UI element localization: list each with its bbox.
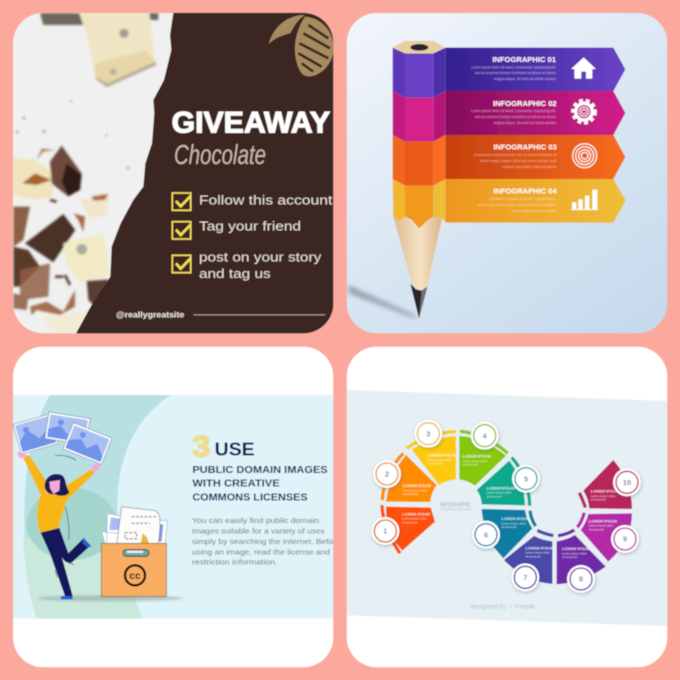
icon: cocoa pod [269,15,333,76]
pencil lead [410,283,427,318]
subheading: PUBLIC DOMAIN IMAGES [192,465,328,476]
segment labels: LOREM IPSUM [562,546,591,551]
orange section [393,135,405,186]
segment labels: sit amet elit [501,525,517,529]
body 01: magna aliqua. Ut enim ad minim veniam [494,77,556,81]
body text: simply by searching the internet. Befo [192,537,333,546]
badge 7 [511,563,539,591]
torn dark background [76,13,333,333]
box [101,507,167,597]
woman [17,452,100,599]
body 04: Ut enim ad minim veniam, quis nostrud exercitation [477,203,556,207]
segment 7 [504,536,552,584]
body 02 [471,109,556,125]
icon: cc: cc [129,571,141,582]
ribbon 1 [445,48,625,91]
pencil tip wood [393,217,442,292]
hair [45,474,69,496]
segment labels: sit amet elit [562,555,577,559]
segment labels: sit amet elit [463,463,478,467]
body 03 [474,153,557,169]
segment labels: LOREM IPSUM [501,516,530,521]
segment labels: LOREM IPSUM [427,453,456,458]
badge 9: 9 [623,535,627,544]
footer credit: designed by ♆ freepik [470,603,536,610]
badge 4 [471,422,499,450]
photo 3 [63,423,112,464]
segment labels: Lorem ipsum dolor [589,524,613,528]
body 02: sed do eiusmod tempor incididunt ut labore et dolore [475,115,556,119]
subheading: COMMONS LICENSES [192,492,308,503]
segment labels: Lorem ipsum dolor [402,517,427,521]
segment labels: sit amet elit [525,554,541,558]
photo: chocolate pieces [13,13,158,333]
shoes [61,537,92,599]
heading number: 3 [192,430,210,463]
pencil top [393,41,445,53]
photos [13,412,112,464]
panel: creative commons [13,347,333,667]
body 01: Lorem ipsum dolor sit amet, consectetur adipiscing elit, [471,65,556,69]
yellow section [393,179,405,221]
segment labels: Lorem ipsum dolor [463,459,487,463]
body text: images suitable for a variety of uses [192,526,325,535]
segment 9 [581,513,632,562]
subheading: WITH CREATIVE [192,479,280,490]
number badges [371,420,641,593]
icon: checkbox 3 [172,255,191,273]
box body [101,543,166,597]
segment labels: sit amet elit [427,462,443,466]
badge 1: 1 [383,527,387,536]
panel: pencil infographic [347,13,667,333]
checklist [172,192,333,281]
segment labels: LOREM IPSUM [589,518,617,523]
body 04: ullamco laboris nisi ut aliquip [512,209,556,213]
title 02: INFOGRAPHIC 02 [493,99,557,108]
badge 6 [472,521,500,549]
badge 5: 5 [524,474,528,483]
body 01 [471,65,556,81]
badge 7: 7 [523,573,527,582]
segment labels: Lorem ipsum dolor [487,491,511,495]
badge 9 [611,525,639,553]
segment 8 [557,535,606,584]
torso [37,491,68,533]
pencil shadow [348,285,415,318]
icon: bars [571,190,598,210]
trousers [41,528,89,596]
tilted band [347,390,667,626]
title 01: INFOGRAPHIC 01 [492,55,557,64]
segment labels: Lorem ipsum dolor [427,458,452,462]
subheading [192,465,328,503]
icon: gear [573,101,595,123]
segment labels: Lorem ipsum dolor [562,551,587,555]
icon: checkbox 1 [172,193,191,210]
purple section [393,48,405,98]
title 03: INFOGRAPHIC 03 [493,143,557,152]
motion lines [55,455,76,577]
segment 5 [477,461,525,505]
badge 8: 8 [579,575,583,584]
badge 6: 6 [484,530,488,539]
segment labels: Lorem ipsum dolor [403,488,427,492]
badge 5 [512,465,540,493]
body 04: Incididunt ut labore et dolore magna aliqua. [489,197,556,201]
body 02: Lorem ipsum dolor sit amet, consectetur adipiscing elit, [471,109,556,113]
segment labels: sit amet elit [487,494,502,498]
segment 6 [482,509,532,558]
segment labels: LOREM IPSUM [591,489,619,494]
segment labels: LOREM IPSUM [463,454,491,459]
badge 3 [414,420,442,448]
handle: @reallygreatsite [116,311,185,320]
center sublabel: LOREM IPSUM [440,508,471,512]
heading use: USE [215,439,255,460]
icon: checkbox 2 [172,222,191,239]
segment labels: Lorem ipsum dolor [591,494,615,498]
icon: house [571,57,596,79]
body text: using an image, read the license and [192,547,330,556]
hands [17,452,100,472]
heading: chocolate: Chocolate [174,139,266,170]
segment labels: sit amet elit [403,492,418,496]
teal swoosh [24,395,171,618]
segment labels: Lorem ipsum dolor [501,521,526,525]
ribbon 4 [445,179,626,223]
green swoosh [23,537,143,618]
body 03: nostrud exercitation ullamco laboris [502,165,557,169]
segment 10 [583,460,632,509]
segment labels: LOREM IPSUM [403,483,431,488]
arms [23,455,95,501]
segment labels: sit amet elit [591,498,606,502]
badge 10 [613,468,641,496]
item: post line 2: and tag us [199,266,271,281]
item: post: post on your story [199,250,322,265]
heading: giveaway: GIVEAWAY [172,107,330,140]
badge 4: 4 [483,431,488,440]
body 03: dolore magna aliqua. Enim ad minim veniam, quis [480,159,557,163]
body text: restriction information. [192,558,277,567]
panel: spiral infographic [347,347,667,667]
papers [102,513,123,544]
panel: chocolate giveaway [13,13,333,333]
item: tag: Tag your friend [199,219,301,234]
segment 4 [459,436,506,486]
segment labels: LOREM IPSUM [525,545,554,550]
segment labels [402,453,619,559]
arc accents [382,431,585,553]
face [49,480,60,494]
pencil [393,41,445,318]
ribbon 2 [445,91,625,135]
icon: target [573,144,597,168]
badge 3: 3 [426,429,430,438]
body 04 [477,197,556,213]
segment labels: LOREM IPSUM [487,485,515,490]
badge 10: 10 [623,478,631,487]
badge 8 [567,565,595,593]
ribbon 3 [445,135,625,179]
segments [382,431,632,584]
body 02: magna aliqua. Ut enim ad minim veniam [494,121,556,125]
box handle [123,550,149,556]
segment labels: Lorem ipsum dolor [525,551,550,555]
floor shadow [37,595,183,601]
segment 2 [386,455,437,502]
segment 1 [386,507,435,551]
badge 2: 2 [385,470,389,479]
photo 1 [13,414,58,454]
pencil graphite [410,44,428,51]
body 03: Consectetur adipiscing elit, sed do eiusmod tempor et [474,153,557,157]
badge 2 [373,460,401,488]
segment labels: sit amet elit [589,527,604,531]
segment 3 [412,436,456,485]
item: follow: Follow this account [199,192,333,207]
body text [192,516,333,567]
segment labels: sit amet elit [402,520,417,524]
title 04: INFOGRAPHIC 04 [493,186,557,195]
badge 1 [371,517,399,545]
magenta section [393,91,405,142]
center label: INFOGRAPHIC [440,502,471,509]
photo 2 [45,412,90,445]
body 01: sed do eiusmod tempor incididunt ut labore et dolore [475,71,556,75]
circle [27,488,117,560]
body text: You can easily find public domain [192,516,319,525]
segment labels: LOREM IPSUM [402,511,431,516]
